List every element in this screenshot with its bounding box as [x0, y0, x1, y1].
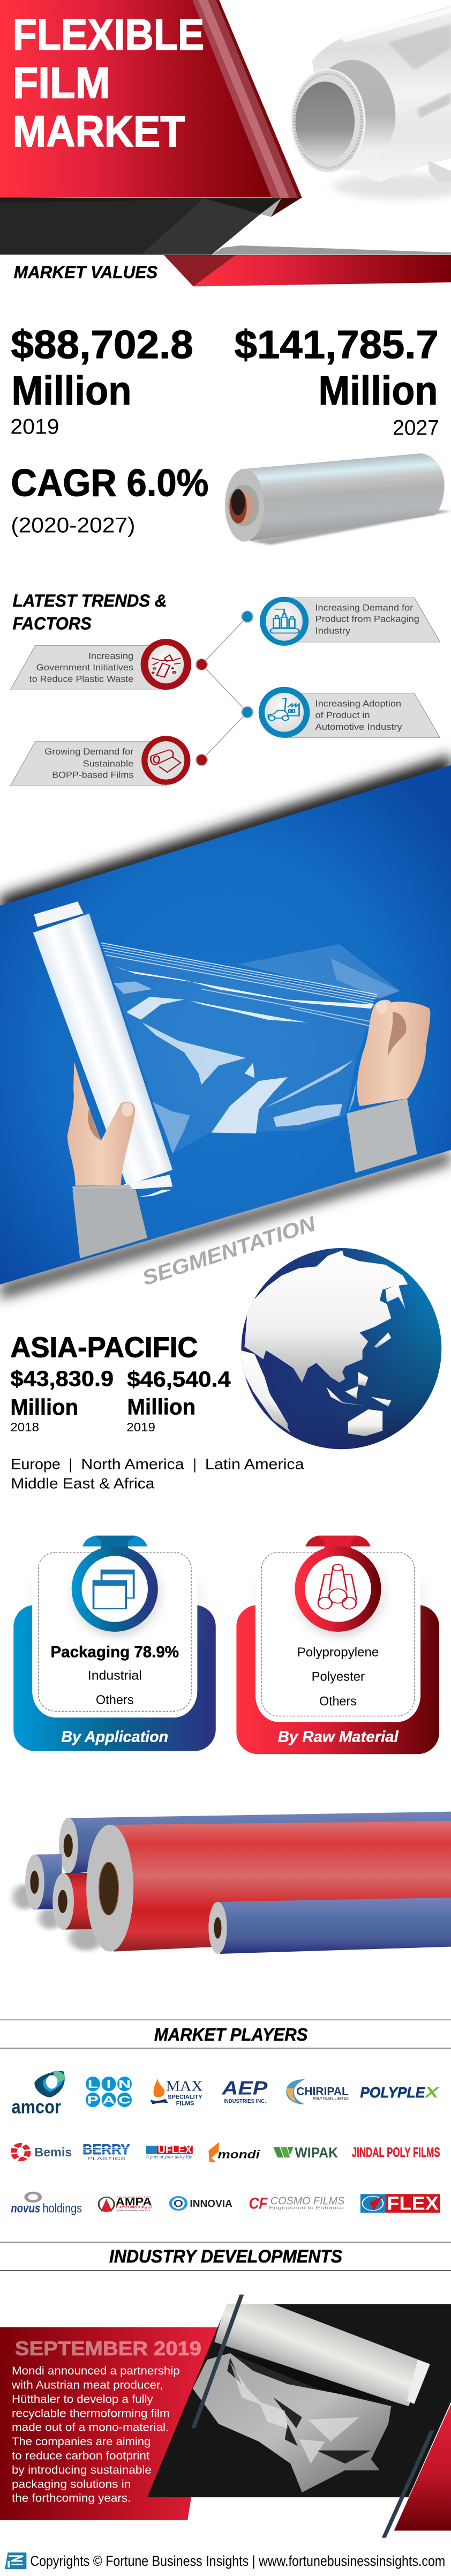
logo: polyplex: X — [424, 2084, 440, 2101]
badge ring — [295, 1546, 381, 1632]
value 2018: 2018 — [10, 1420, 39, 1434]
logo: max speciality films: SPECIALITY — [168, 2094, 202, 2101]
left sleeve lower — [72, 1190, 147, 1258]
factor: packaging demand: Increasing Demand for — [315, 602, 413, 613]
icon: film roll — [151, 750, 181, 772]
title — [13, 10, 204, 156]
logo: berry plastics: PLASTICS — [87, 2157, 126, 2161]
logo: linpac: A — [102, 2094, 115, 2106]
heading: LATEST TRENDS & — [13, 591, 167, 610]
logo: aep industries: INDUSTRIES INC. — [223, 2098, 266, 2104]
logo: innovia: INNOVIA — [190, 2198, 232, 2209]
value 2018: Million — [10, 1394, 78, 1420]
logo: novus holdings — [11, 2193, 82, 2215]
logo: uflex — [145, 2145, 193, 2160]
factor: automotive adoption: of Product in — [315, 710, 370, 720]
logo: mondi — [208, 2142, 260, 2162]
heading: FACTORS — [13, 614, 92, 633]
asia-pacific — [10, 1248, 441, 1449]
logo: ampa: Happy New Year 2021 — [117, 2196, 151, 2199]
blue photo panel — [0, 755, 451, 1300]
panel shadows — [0, 755, 451, 1300]
logo: aep industries: AEP — [222, 2078, 268, 2099]
application list: Others — [96, 1692, 134, 1707]
left sleeve — [72, 1185, 133, 1190]
logo: ampa: PLASTICS GROUP (Pty) Ltd — [116, 2206, 152, 2209]
development text: Mondi announced a partnership — [12, 2364, 180, 2377]
development text: recyclable thermoforming film — [12, 2407, 170, 2420]
factor: packaging demand — [260, 597, 440, 646]
other regions: | — [69, 1455, 72, 1473]
header banner — [0, 0, 451, 287]
photo: film on black — [147, 2304, 451, 2497]
logo: amcor — [11, 2071, 65, 2117]
logo: linpac — [86, 2077, 132, 2107]
photo: hands stretching film — [33, 901, 430, 1190]
material list: Polyester — [312, 1669, 365, 1684]
industry developments — [0, 2242, 451, 2569]
film highlights — [114, 959, 400, 1154]
logo: chiripal — [286, 2079, 349, 2104]
factor: BOPP films: BOPP-based Films — [52, 770, 133, 780]
logo: bemis — [14, 2145, 72, 2159]
logo: ampa: Quality and reliability since 1973 — [116, 2209, 150, 2212]
logo: uflex: A part of your daily life — [145, 2154, 192, 2160]
factor: government initiatives — [10, 639, 191, 690]
date: SEPTEMBER 2019 — [15, 2338, 201, 2360]
title: MARKET — [13, 107, 185, 156]
logo: berry plastics: BERRY — [82, 2141, 130, 2157]
diagonal stripes — [193, 0, 302, 198]
heading: asia-pacific: ASIA-PACIFIC — [10, 1332, 198, 1364]
left hand — [67, 1062, 135, 1186]
latest trends and factors — [10, 591, 440, 786]
segmentation — [72, 1190, 172, 1258]
logo: innovia — [170, 2197, 232, 2210]
logo: ampa — [99, 2196, 152, 2212]
other regions: Europe — [11, 1455, 61, 1473]
icon: pipes — [318, 1564, 357, 1609]
factor: automotive adoption: Increasing Adoption — [315, 699, 401, 708]
CAGR: CAGR 6.0% — [11, 461, 208, 504]
logo: wipak: WIPAK — [295, 2145, 338, 2161]
CAGR period: (2020-2027) — [11, 513, 135, 537]
heading rules — [0, 2020, 451, 2049]
development text: with Austrian meat producer, — [11, 2379, 163, 2392]
logo: max speciality films — [150, 2078, 203, 2107]
label: by application: By Application — [61, 1729, 168, 1745]
development text: The companies are aiming — [12, 2435, 151, 2448]
film roll illustration — [225, 453, 451, 545]
factor: government initiatives: Increasing — [88, 651, 133, 661]
title: FLEXIBLE — [13, 10, 204, 59]
roll core lower — [138, 1190, 172, 1197]
logo: novus holdings: novus — [11, 2201, 40, 2215]
back blue roll — [59, 1812, 451, 1874]
material list: Polypropylene — [297, 1645, 379, 1659]
logo: linpac: P — [87, 2094, 99, 2106]
factor: BOPP films — [10, 736, 190, 786]
logo: uflex: UFLEX — [158, 2145, 192, 2155]
other regions: Latin America — [205, 1455, 304, 1473]
material list — [297, 1645, 379, 1708]
heading: market values: MARKET VALUES — [14, 263, 158, 282]
other regions: Middle East & Africa — [11, 1475, 154, 1491]
logo: aep industries — [222, 2078, 268, 2104]
regions and segment cards — [11, 1455, 439, 1754]
card: by raw material — [236, 1536, 439, 1754]
factor: government initiatives: Government Initiatives — [36, 662, 133, 673]
badge ring — [72, 1546, 158, 1632]
material list: Others — [319, 1694, 357, 1708]
development text: packaging solutions in — [12, 2477, 131, 2490]
panel fill — [0, 765, 451, 1285]
value 2019 — [11, 323, 193, 413]
icon: windows — [94, 1570, 134, 1609]
development text: the forthcoming years. — [12, 2492, 131, 2505]
development text: to reduce carbon footprint — [12, 2450, 149, 2462]
red title panel — [0, 0, 272, 198]
logo: mondi: mondi — [218, 2148, 260, 2161]
logo: amcor: amcor — [11, 2096, 61, 2117]
other regions: North America — [81, 1455, 184, 1473]
value 2027 — [235, 323, 439, 413]
red section band — [164, 255, 451, 287]
market values — [10, 323, 451, 545]
logo: novus holdings: holdings — [42, 2201, 82, 2215]
factor: government initiatives: to Reduce Plastic Waste — [29, 674, 133, 684]
film highlights — [230, 2362, 359, 2463]
logo: linpac: L — [88, 2078, 98, 2090]
left red panel — [0, 2327, 219, 2520]
factor: BOPP films: Sustainable — [83, 758, 133, 768]
application list — [88, 1668, 142, 1707]
value 2019: 2019 — [126, 1420, 155, 1434]
icon: plastic waste — [152, 655, 181, 677]
connector dots — [196, 611, 253, 766]
factor: automotive adoption — [259, 687, 440, 738]
other regions: | — [193, 1455, 197, 1473]
right sleeve — [347, 1098, 417, 1173]
development text: Hütthaler to develop a fully — [12, 2393, 153, 2406]
coloured film rolls — [13, 1812, 451, 1954]
logo: chiripal: POLY FILMS LIMITED — [313, 2096, 349, 2100]
value 2018 — [10, 1367, 114, 1434]
film tension lines — [101, 943, 377, 1026]
development text: made out of a mono-material. — [12, 2421, 169, 2434]
left small blue roll — [25, 1854, 62, 1910]
development text — [11, 2364, 180, 2505]
right hand — [357, 1000, 430, 1106]
heading: MARKET PLAYERS — [154, 2025, 308, 2044]
logo: cosmo films: CF — [249, 2194, 268, 2212]
logo: berry plastics — [82, 2141, 131, 2161]
logo: ampa: AMPA — [116, 2196, 152, 2208]
ribbon — [305, 1536, 371, 1547]
logo: flex — [360, 2193, 440, 2214]
stretched film — [101, 943, 400, 1154]
factor: automotive adoption: Automotive Industry — [315, 722, 402, 732]
logo: max speciality films: FILMS — [176, 2101, 194, 2107]
globe — [241, 1248, 441, 1449]
small red roll — [52, 1873, 92, 1930]
logo: cosmo films: COSMO FILMS — [270, 2194, 345, 2207]
connector lines — [201, 617, 247, 760]
heading — [13, 591, 167, 633]
value 2019 — [126, 1367, 231, 1434]
logo: linpac: I — [107, 2078, 111, 2090]
value 2019: Million — [11, 368, 131, 413]
other regions — [11, 1455, 304, 1491]
heading: segmentation: SEGMENTATION — [139, 1212, 319, 1290]
roll shadows — [13, 1885, 103, 1951]
logo: bemis: Bemis — [34, 2145, 72, 2159]
icon: car and factory — [268, 699, 299, 720]
ribbon — [82, 1536, 147, 1547]
leading segment: Packaging 78.9% — [51, 1644, 179, 1661]
value 2019: $88,702.8 — [11, 323, 193, 367]
film roll — [33, 901, 172, 1190]
factor: BOPP films: Growing Demand for — [44, 746, 133, 757]
heading: INDUSTRY DEVELOPMENTS — [109, 2246, 342, 2267]
heading rules — [0, 2242, 451, 2271]
market players — [0, 2020, 451, 2215]
film creases — [227, 2353, 391, 2463]
footer logo — [5, 2552, 26, 2569]
value 2019: Million — [127, 1394, 196, 1419]
application list: Industrial — [88, 1668, 142, 1683]
year 2019: 2019 — [10, 415, 59, 438]
factor: packaging demand: Industry — [315, 626, 350, 636]
logo: chiripal: CHIRIPAL — [296, 2085, 349, 2098]
dark folded band — [0, 198, 451, 255]
development text: by introducing sustainable — [12, 2463, 152, 2476]
right red accent — [394, 2404, 451, 2530]
value 2019: $46,540.4 — [127, 1367, 231, 1392]
card: by application — [13, 1536, 216, 1751]
logo: max speciality films: MAX — [166, 2078, 203, 2094]
logo: linpac: C — [118, 2094, 131, 2106]
logo: wipak — [273, 2145, 338, 2161]
front blue roll — [208, 1898, 451, 1954]
title: FILM — [13, 58, 110, 107]
large red roll — [86, 1821, 451, 1952]
logo: cosmo films — [249, 2194, 345, 2212]
logo: cosmo films: Engineered to Enhance — [269, 2205, 344, 2211]
slash accents — [191, 2295, 434, 2538]
logo: linpac: N — [118, 2078, 131, 2090]
header photo: film roll — [291, 5, 451, 199]
value 2018: $43,830.9 — [10, 1367, 114, 1391]
icon: bottles on conveyor — [270, 609, 299, 633]
icon bars — [94, 1570, 134, 1586]
